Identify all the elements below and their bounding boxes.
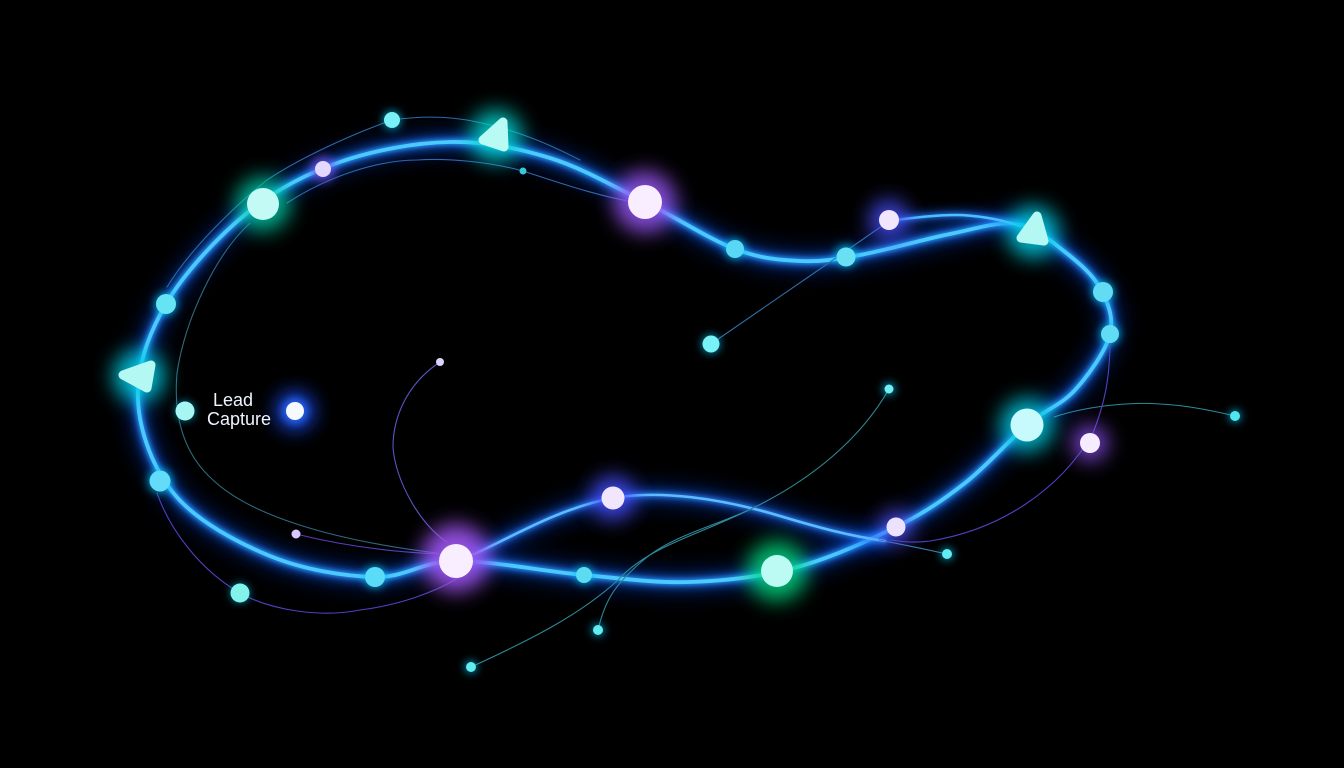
small nodes <box>148 111 1241 673</box>
upper right strand <box>889 215 1020 226</box>
thin branch lines <box>157 117 1235 667</box>
arrow: top <box>483 122 504 147</box>
label: Lead Capture <box>207 390 271 429</box>
arrow: right <box>1021 216 1044 241</box>
node glows <box>113 110 1108 601</box>
inner crossing strand <box>456 495 885 562</box>
main glowing loop <box>138 142 1111 582</box>
label: Lead Capture: Lead <box>213 390 253 410</box>
arrow: left <box>123 365 151 388</box>
label: Lead Capture: Capture <box>207 409 271 429</box>
large nodes <box>247 185 1044 587</box>
